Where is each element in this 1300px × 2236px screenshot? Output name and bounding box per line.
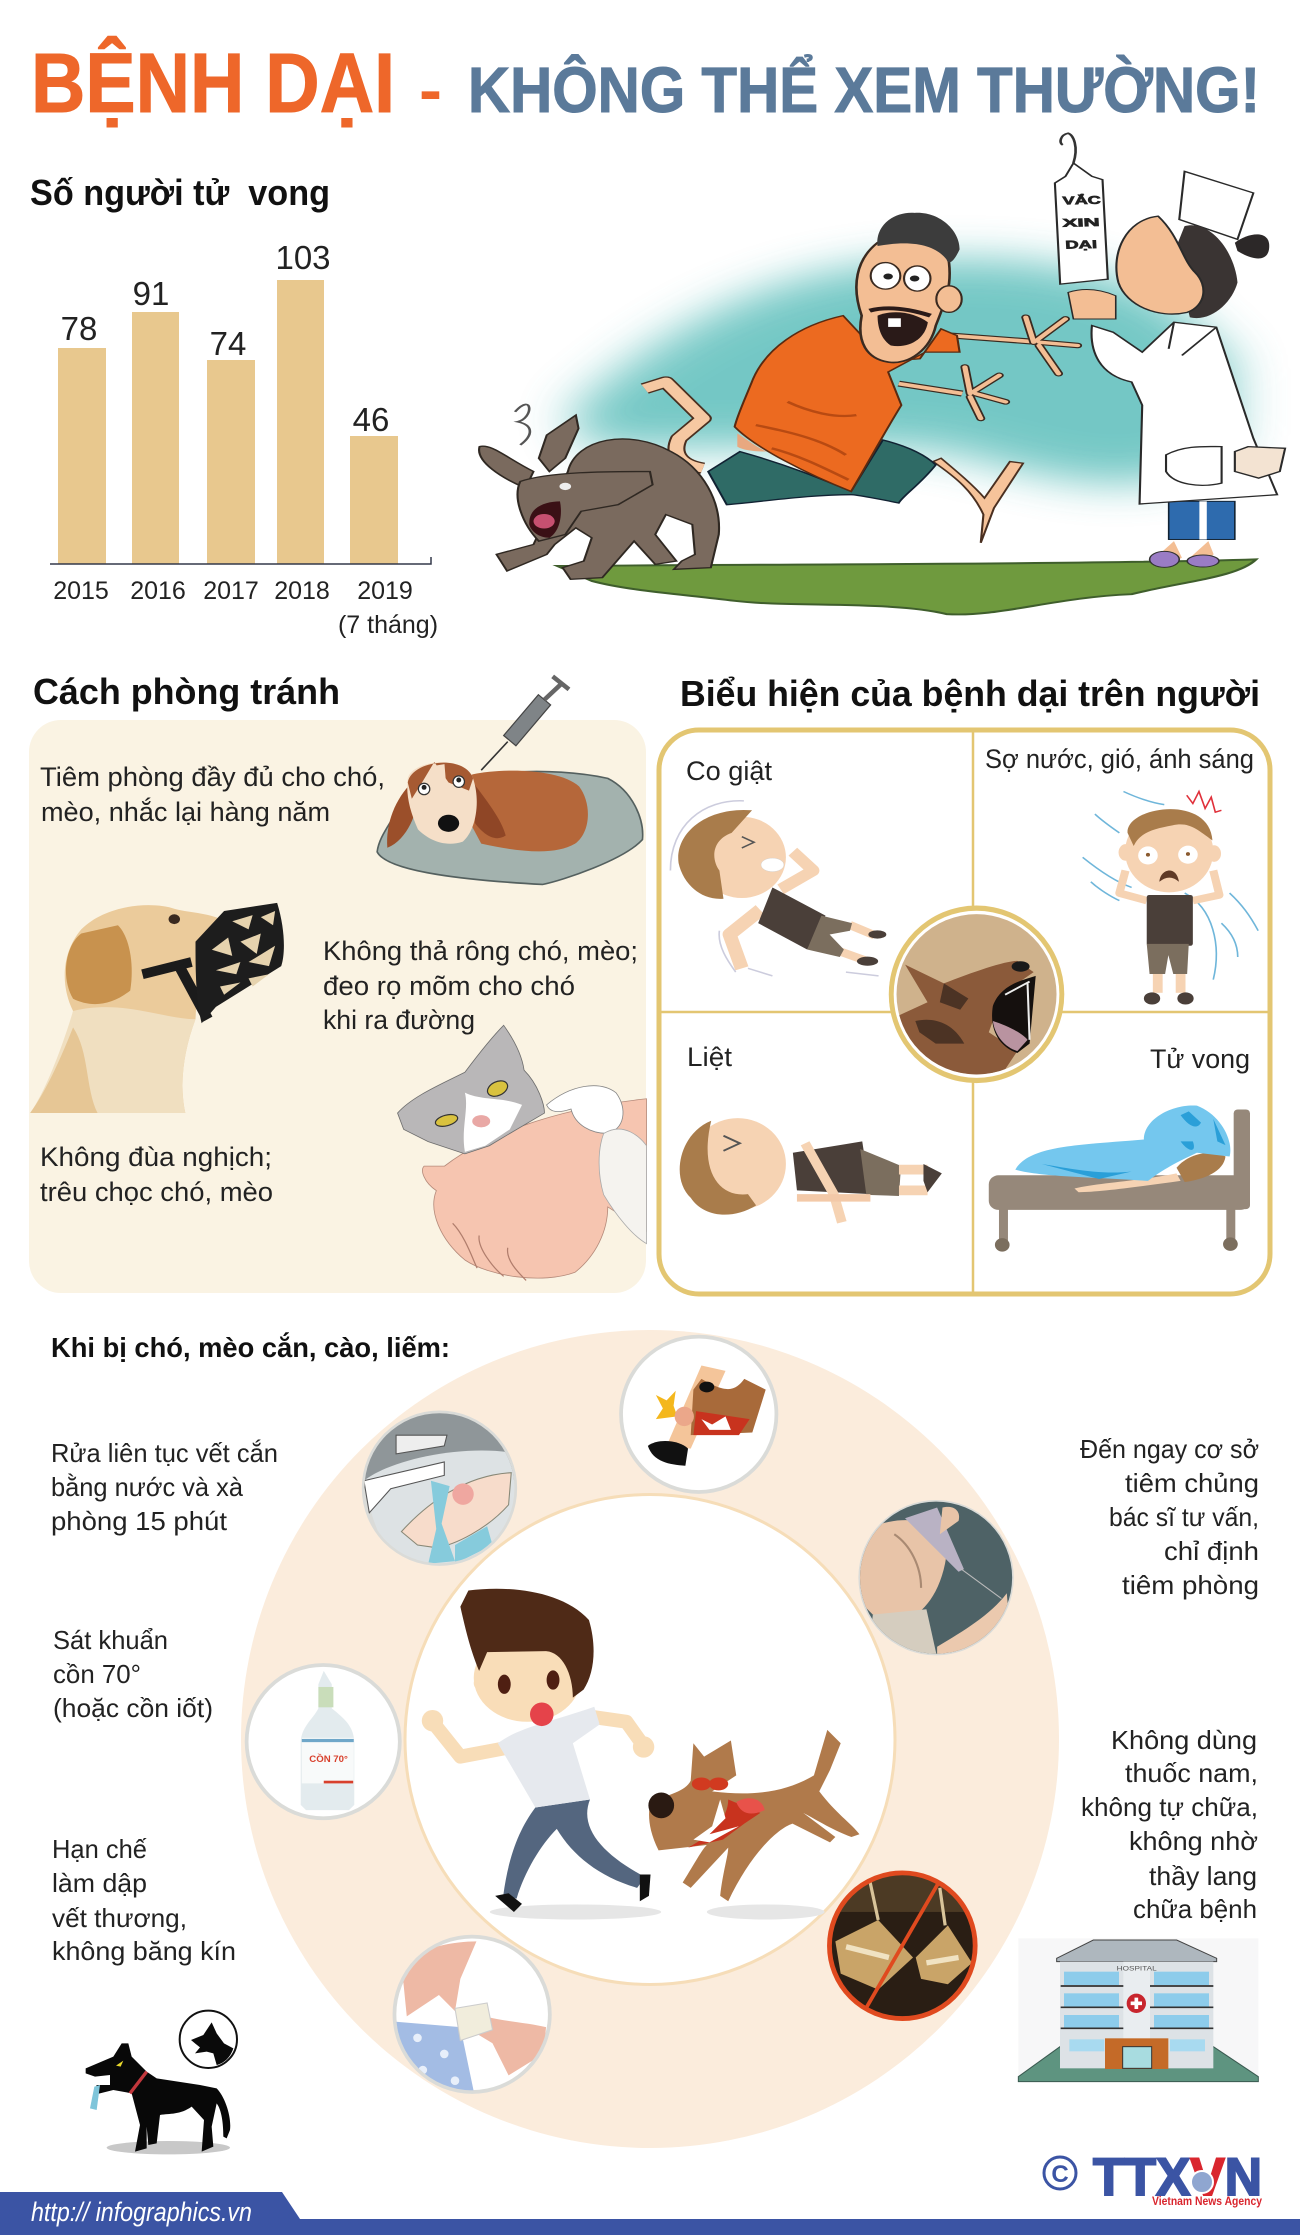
- icon: hospital building: [1018, 1938, 1258, 2082]
- year labels: [53, 577, 438, 639]
- prevention tips text: mèo, nhắc lại hàng năm: [41, 796, 330, 827]
- heading: deaths: Số người tử vong: [30, 172, 330, 213]
- right steps text: Không dùng: [1111, 1725, 1257, 1755]
- illustration: paralysed boy: [680, 1118, 942, 1222]
- center image: snarling rabid dog: [889, 906, 1064, 1083]
- bars: [58, 280, 398, 564]
- step circle: no herbal medicine: [829, 1873, 975, 2019]
- right steps text: bác sĩ tư vấn,: [1109, 1502, 1259, 1532]
- symptom labels: Liệt: [687, 1042, 732, 1072]
- icon: rabid black dog: [86, 2011, 237, 2154]
- illustration: frightened boy with wind: [1083, 791, 1258, 1004]
- bar values: [61, 239, 389, 438]
- prevention tips text: khi ra đường: [323, 1005, 475, 1035]
- panel: first aid after bite: [51, 1330, 1259, 2148]
- panel: prevention: [29, 671, 647, 1293]
- prevention tips text: [40, 762, 638, 1207]
- panel background: [29, 720, 646, 1293]
- vaccine bottle: XIN: [1062, 216, 1100, 230]
- cartoon: man fleeing rabid dog towards vaccine: [479, 133, 1285, 614]
- illustration: convulsing boy: [670, 801, 886, 976]
- left steps text: Hạn chế: [52, 1834, 148, 1864]
- vaccine bottle: DẠI: [1065, 238, 1097, 252]
- illustration: dog wearing muzzle: [30, 903, 284, 1113]
- left steps text: không băng kín: [52, 1936, 236, 1966]
- icon: hospital building: HOSPITAL: [1117, 1966, 1157, 1973]
- panel: symptoms: [659, 673, 1270, 1294]
- illustration: cat biting hand: [398, 1025, 647, 1280]
- title: [31, 36, 1260, 130]
- man arms: [952, 336, 1031, 342]
- footer bar: [0, 2192, 1300, 2235]
- man head: [856, 236, 950, 362]
- year labels: (7 tháng): [338, 611, 438, 639]
- step circle: dog bite: [621, 1337, 776, 1492]
- left steps text: (hoặc cồn iốt): [53, 1693, 213, 1723]
- bar values: 91: [133, 275, 169, 312]
- right steps text: tiêm chủng: [1125, 1468, 1259, 1498]
- logo: TTXVN: Vietnam News Agency: [1152, 2194, 1262, 2208]
- symptom labels: [686, 744, 1254, 1074]
- step circle: washing wound: [359, 1411, 519, 1572]
- year labels: 2019: [357, 577, 413, 605]
- step circle: alcohol bottle: CỒN 70°: [309, 1753, 348, 1765]
- title: BỆNH DẠI: [31, 36, 395, 130]
- inner white circle: [405, 1494, 895, 1984]
- grass: [557, 559, 1256, 614]
- heading: symptoms: Biểu hiện của bệnh dại trên người: [680, 673, 1260, 714]
- bar values: 46: [353, 401, 389, 438]
- right steps text: chỉ định: [1164, 1536, 1259, 1566]
- left steps text: Rửa liên tục vết cắn: [51, 1438, 278, 1468]
- footer url: http:// infographics.vn: [31, 2197, 252, 2227]
- heading: first aid: Khi bị chó, mèo cắn, cào, liếm:: [51, 1332, 450, 1363]
- left steps text: [51, 1438, 278, 1966]
- left steps text: phòng 15 phút: [51, 1506, 228, 1536]
- symptoms frame: [659, 730, 1270, 1294]
- illustration: person in bed under blanket: [989, 1106, 1250, 1252]
- illustration: dog on pillow with syringe: [377, 676, 643, 884]
- doctor: [1169, 501, 1235, 539]
- left steps text: cồn 70°: [53, 1659, 141, 1689]
- logo: TTXVN: TTXVN: [1093, 2148, 1262, 2207]
- left steps text: bằng nước và xà: [51, 1472, 244, 1502]
- heading: prevention: Cách phòng tránh: [33, 671, 340, 712]
- panel: deaths bar chart: [30, 172, 438, 639]
- year labels: 2015: [53, 577, 109, 605]
- left steps text: vết thương,: [52, 1903, 187, 1933]
- bar values: 103: [275, 239, 331, 276]
- man legs: [645, 382, 703, 468]
- bar values: 78: [61, 310, 97, 347]
- step circle: syringe injection: [857, 1499, 1017, 1657]
- right steps text: Đến ngay cơ sở: [1080, 1434, 1259, 1464]
- prevention tips text: đeo rọ mõm cho chó: [323, 971, 575, 1001]
- prevention tips text: Không đùa nghịch;: [40, 1142, 272, 1172]
- right steps text: không nhờ: [1129, 1826, 1258, 1856]
- bar values: 74: [210, 325, 246, 362]
- logo: TTXVN: C: [1051, 2161, 1069, 2188]
- rabid dog: [479, 415, 719, 579]
- title: -: [419, 54, 442, 126]
- right steps text: thầy lang: [1149, 1861, 1257, 1891]
- right steps text: tiêm phòng: [1122, 1570, 1259, 1600]
- vaccine bottle: VẮC: [1062, 193, 1101, 208]
- prevention tips text: trêu chọc chó, mèo: [40, 1177, 273, 1207]
- right steps text: chữa bệnh: [1133, 1894, 1257, 1924]
- right steps text: không tự chữa,: [1081, 1792, 1258, 1822]
- prevention tips text: Tiêm phòng đầy đủ cho chó,: [40, 762, 385, 792]
- symptom labels: Tử vong: [1150, 1044, 1250, 1074]
- man shirt: [735, 316, 960, 491]
- man shorts: [708, 440, 936, 505]
- left steps text: làm dập: [52, 1868, 147, 1898]
- symptom labels: Co giật: [686, 756, 772, 786]
- symptom labels: Sợ nước, gió, ánh sáng: [985, 744, 1254, 774]
- right steps text: [1080, 1434, 1259, 1924]
- year labels: 2016: [130, 577, 186, 605]
- prevention tips text: Không thả rông chó, mèo;: [323, 936, 638, 966]
- year labels: 2018: [274, 577, 330, 605]
- step circle: alcohol bottle: [247, 1665, 400, 1818]
- step circle: bandaging wound: [394, 1937, 550, 2092]
- left steps text: Sát khuẩn: [53, 1625, 168, 1655]
- illustration: boy running from dog: [422, 1589, 859, 1919]
- vaccine bottle: [1055, 133, 1108, 284]
- right steps text: thuốc nam,: [1125, 1758, 1258, 1788]
- year labels: 2017: [203, 577, 259, 605]
- outer ring: [241, 1330, 1059, 2148]
